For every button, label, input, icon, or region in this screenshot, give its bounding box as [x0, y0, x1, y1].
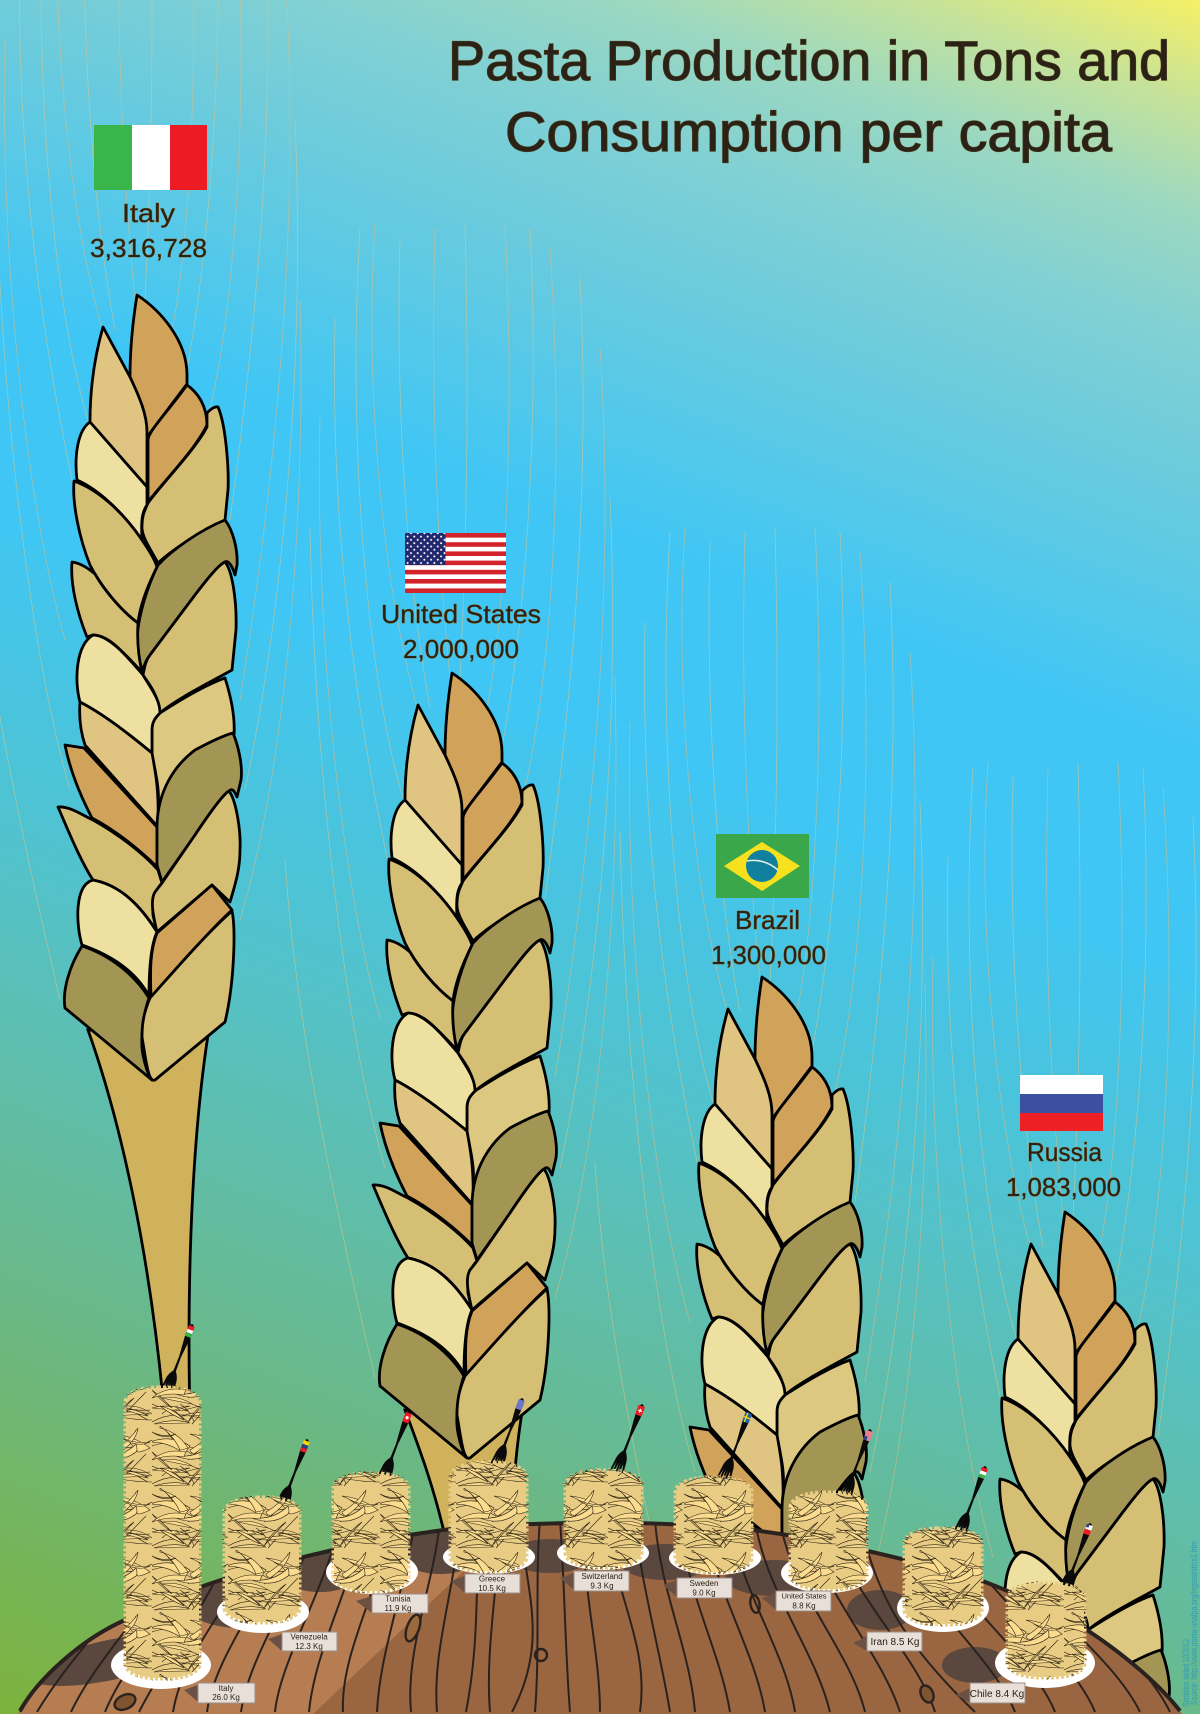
- data label: Italy: 26.0 Kg: [212, 1693, 240, 1702]
- noodle stack: Venezuela: [225, 1498, 299, 1622]
- data label: Iran: [853, 1632, 922, 1651]
- pasta plate: Italy: [111, 1322, 211, 1689]
- data label: United States: 8.8 Kg: [792, 1602, 816, 1610]
- production: Russia: Russia: [1027, 1137, 1102, 1167]
- wheat awns: Italy: [0, 0, 301, 1000]
- data label: United States: [762, 1591, 831, 1611]
- country label: Brazil: [711, 834, 826, 970]
- wheat awns: United States: [285, 223, 616, 1378]
- production: Italy: Italy: [122, 198, 175, 228]
- country label: United States: [381, 533, 541, 664]
- source note: Statistics dated 10/2012: [1181, 1639, 1191, 1707]
- fork: Venezuela: [275, 1437, 314, 1509]
- data label: Italy: Italy: [219, 1684, 233, 1693]
- noodle stack: Tunisia: [334, 1474, 408, 1591]
- fork: Chile: [1058, 1521, 1097, 1593]
- production: Russia: 1,083,000: [1006, 1172, 1121, 1202]
- data label: Chile: [956, 1683, 1025, 1703]
- data label: Greece: 10.5 Kg: [478, 1584, 506, 1593]
- production: Russia: [1006, 1137, 1121, 1202]
- source note: Source: http://www.pasta-unafpa.org/ingstatistics1.htm: [1189, 1541, 1199, 1705]
- data label: United States: United States: [781, 1592, 827, 1600]
- noodle stack: Switzerland: [566, 1471, 641, 1567]
- data label: Venezuela: Venezuela: [290, 1632, 328, 1642]
- production: Italy: [90, 198, 207, 263]
- fork: United States: [838, 1427, 877, 1499]
- pasta plate: Greece: [443, 1396, 535, 1574]
- noodle stack: Chile: [1008, 1584, 1084, 1677]
- data label: Iran: Iran 8.5 Kg: [871, 1637, 919, 1648]
- wheat: Brazil: [683, 977, 866, 1614]
- production: United States: 2,000,000: [403, 634, 519, 664]
- fork: Sweden: [717, 1409, 756, 1481]
- data label: Tunisia: 11.9 Kg: [385, 1604, 411, 1613]
- data label: Sweden: [663, 1578, 732, 1598]
- fork: Tunisia: [377, 1409, 416, 1481]
- country label: Italy: [90, 125, 207, 263]
- production: United States: United States: [381, 599, 541, 629]
- pasta plate: Sweden: [669, 1409, 761, 1575]
- flag: Brazil: [716, 834, 809, 898]
- pasta plate: United States: [781, 1427, 877, 1593]
- production: Brazil: 1,300,000: [711, 940, 826, 970]
- production: Italy: 3,316,728: [90, 233, 207, 263]
- pasta plate: Chile: [995, 1521, 1097, 1688]
- noodle stack: Greece: [451, 1463, 526, 1571]
- fork: Iran: [953, 1464, 992, 1536]
- data label: Venezuela: 12.3 Kg: [295, 1642, 323, 1651]
- data label: Sweden: 9.0 Kg: [692, 1588, 716, 1598]
- pasta plate: Tunisia: [326, 1409, 418, 1594]
- wood knots: [112, 1594, 936, 1713]
- noodle stack: United States: [791, 1493, 866, 1589]
- data label: Greece: Greece: [479, 1574, 506, 1584]
- production: United States: [381, 599, 541, 664]
- flag: Italy: [94, 125, 207, 190]
- noodle stack: Iran: [905, 1529, 981, 1624]
- wheat awns: Brazil: [595, 527, 926, 1682]
- wheat: Italy: [58, 295, 241, 1420]
- data label: Chile: Chile 8.4 Kg: [970, 1689, 1024, 1700]
- data label: Switzerland: 9.3 Kg: [590, 1582, 614, 1590]
- data label: Greece: [451, 1574, 520, 1593]
- data label: Switzerland: [560, 1571, 629, 1591]
- data label: Sweden: Sweden: [690, 1579, 718, 1588]
- data label: Switzerland: Switzerland: [581, 1572, 623, 1581]
- fork: Switzerland: [610, 1402, 649, 1474]
- noodle stack: Italy: [126, 1388, 199, 1678]
- pasta plate: Switzerland: [557, 1402, 649, 1570]
- pasta plate: Venezuela: [217, 1437, 314, 1633]
- pasta plate: Iran: [897, 1464, 992, 1632]
- title: Consumption per capita: [505, 100, 1113, 163]
- country label: Russia: [1006, 1075, 1121, 1202]
- fork: Greece: [490, 1396, 529, 1468]
- wheat: United States: [373, 673, 556, 1545]
- source note: [1181, 1541, 1199, 1707]
- data label: Tunisia: Tunisia: [385, 1594, 411, 1604]
- production: Brazil: Brazil: [735, 905, 800, 935]
- flag: Russia: [1020, 1075, 1103, 1131]
- wooden table: [18, 1521, 1182, 1714]
- title: Pasta Production in Tons and: [448, 29, 1170, 92]
- noodle stack: Sweden: [676, 1478, 751, 1572]
- title: [448, 29, 1170, 163]
- data label: Italy: [184, 1683, 255, 1703]
- flag: United States: [405, 533, 506, 593]
- wheat awns: Russia: [932, 762, 1196, 1557]
- data label: Venezuela: [268, 1632, 337, 1651]
- data label: Tunisia: [356, 1594, 428, 1613]
- production: Brazil: [711, 905, 826, 970]
- fork: Italy: [160, 1322, 199, 1394]
- wheat: Russia: [1000, 1212, 1169, 1711]
